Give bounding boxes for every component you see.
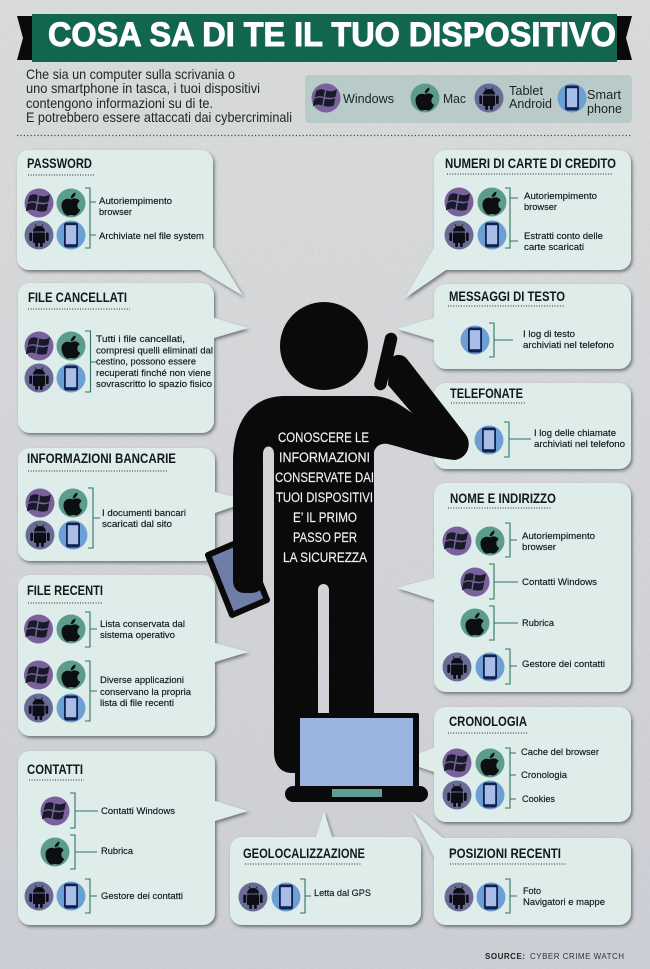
panel: file recenti: sistema operativo xyxy=(100,630,175,641)
panel: numeri di carte di credito: NUMERI DI CARTE DI CREDITO xyxy=(445,155,616,171)
intro text: E potrebbero essere attaccati dai cybercriminali xyxy=(26,109,292,125)
icon: laptop xyxy=(285,713,428,802)
icon: phone at ear xyxy=(380,339,391,384)
panel: contatti: CONTATTI xyxy=(27,761,83,777)
legend xyxy=(305,75,632,123)
panel: posizioni recenti: Foto xyxy=(523,886,541,897)
panel: nome e indirizzo: NOME E INDIRIZZO xyxy=(450,490,556,506)
panel: telefonate: TELEFONATE xyxy=(450,385,523,401)
source: SOURCE: xyxy=(485,952,525,961)
panel: password xyxy=(17,150,243,296)
panel: nome e indirizzo: Rubrica xyxy=(522,618,555,629)
intro text: contengono informazioni su di te. xyxy=(26,95,213,111)
panel: file recenti xyxy=(18,575,248,736)
central message: INFORMAZIONI xyxy=(279,450,370,465)
legend: Tablet xyxy=(509,83,543,98)
panel: telefonate: archiviati nel telefono xyxy=(534,439,625,450)
panel: cronologia: Cache del browser xyxy=(521,747,599,758)
legend: phone xyxy=(587,101,622,116)
panel: numeri di carte di credito: Autoriempimento xyxy=(524,191,597,202)
panel: messaggi di testo: archiviati nel telefono xyxy=(523,340,614,351)
source: CYBER CRIME WATCH xyxy=(530,952,624,961)
body silhouette xyxy=(233,355,469,780)
panel: password: Archiviate nel file system xyxy=(99,231,204,242)
intro text xyxy=(26,66,292,125)
panel: nome e indirizzo xyxy=(397,483,631,692)
central message: TUOI DISPOSITIVI xyxy=(276,490,373,505)
title banner: COSA SA DI TE IL TUO DISPOSITIVO xyxy=(48,16,616,54)
panel: telefonate: I log delle chiamate xyxy=(534,428,616,439)
panel: informazioni bancarie xyxy=(18,448,250,561)
panel: numeri di carte di credito xyxy=(405,150,631,298)
panel: geolocalizzazione xyxy=(230,811,421,925)
panel: numeri di carte di credito: carte scaricati xyxy=(524,242,584,253)
panel: file cancellati xyxy=(18,283,248,433)
panel: informazioni bancarie: I documenti bancari xyxy=(102,508,186,519)
panel: messaggi di testo: I log di testo xyxy=(523,329,575,340)
central message: PASSO PER xyxy=(293,530,357,545)
panel: file cancellati: cestino, possono essere xyxy=(96,356,196,368)
panel: file recenti: lista di file recenti xyxy=(100,698,174,709)
central message: E’ IL PRIMO xyxy=(293,510,357,525)
panel: posizioni recenti xyxy=(412,812,631,925)
panel: file recenti: conservano la propria xyxy=(100,687,192,698)
panel: geolocalizzazione: Letta dal GPS xyxy=(314,888,371,899)
icon: tablet xyxy=(208,540,267,615)
legend: Android xyxy=(509,96,552,111)
panel: numeri di carte di credito: Estratti conto delle xyxy=(524,231,603,242)
central message xyxy=(275,430,374,565)
panel: contatti xyxy=(18,751,248,925)
panel: contatti: Gestore dei contatti xyxy=(101,891,183,902)
panel: file cancellati: recuperati finché non viene xyxy=(96,368,211,379)
panel: cronologia: Cronologia xyxy=(521,770,568,781)
panel: geolocalizzazione: GEOLOCALIZZAZIONE xyxy=(243,845,365,861)
panel: numeri di carte di credito: browser xyxy=(524,202,557,213)
central message: CONSERVATE DAI xyxy=(275,470,374,485)
panel: posizioni recenti: Navigatori e mappe xyxy=(523,897,605,908)
figure: person with devices xyxy=(208,302,469,802)
panel: contatti: Contatti Windows xyxy=(101,806,175,817)
central message: CONOSCERE LE xyxy=(278,430,369,445)
panel: file cancellati: Tutti i file cancellati, xyxy=(96,334,185,345)
panel: password: PASSWORD xyxy=(27,155,92,171)
panel: file cancellati: compresi quelli eliminati dal xyxy=(96,346,213,356)
panel: nome e indirizzo: Autoriempimento xyxy=(522,531,595,542)
panel: file recenti: Lista conservata dal xyxy=(100,619,185,630)
panel: file recenti: Diverse applicazioni xyxy=(100,675,184,686)
panel: password: browser xyxy=(99,207,132,218)
head xyxy=(280,302,368,390)
legend: Windows xyxy=(343,91,394,106)
panel: cronologia xyxy=(410,707,631,822)
panel: nome e indirizzo: Gestore dei contatti xyxy=(522,659,605,670)
panel: file cancellati: FILE CANCELLATI xyxy=(28,289,127,305)
panel: contatti: Rubrica xyxy=(101,846,134,857)
panel: posizioni recenti: POSIZIONI RECENTI xyxy=(449,845,561,861)
panel: telefonate xyxy=(434,383,631,469)
legend: Smart xyxy=(587,87,621,102)
intro text: Che sia un computer sulla scrivania o xyxy=(26,66,235,82)
panel: messaggi di testo: MESSAGGI DI TESTO xyxy=(449,288,565,304)
panel: password: Autoriempimento xyxy=(99,196,172,207)
panel: informazioni bancarie: INFORMAZIONI BANCARIE xyxy=(27,450,176,466)
panel: file recenti: FILE RECENTI xyxy=(27,582,103,598)
legend: Mac xyxy=(443,91,466,106)
panel: nome e indirizzo: browser xyxy=(522,542,556,553)
panel: informazioni bancarie: scaricati dal sito xyxy=(102,519,172,530)
panel: cronologia: CRONOLOGIA xyxy=(449,713,527,729)
source xyxy=(485,952,624,961)
panel: messaggi di testo xyxy=(397,284,631,369)
panel: file cancellati: sovrascritto lo spazio fisico xyxy=(96,379,212,390)
panel: cronologia: Cookies xyxy=(522,794,555,805)
central message: LA SICUREZZA xyxy=(283,550,367,565)
panel: nome e indirizzo: Contatti Windows xyxy=(522,577,597,588)
intro text: uno smartphone in tasca, i tuoi dispositivi xyxy=(26,80,260,96)
